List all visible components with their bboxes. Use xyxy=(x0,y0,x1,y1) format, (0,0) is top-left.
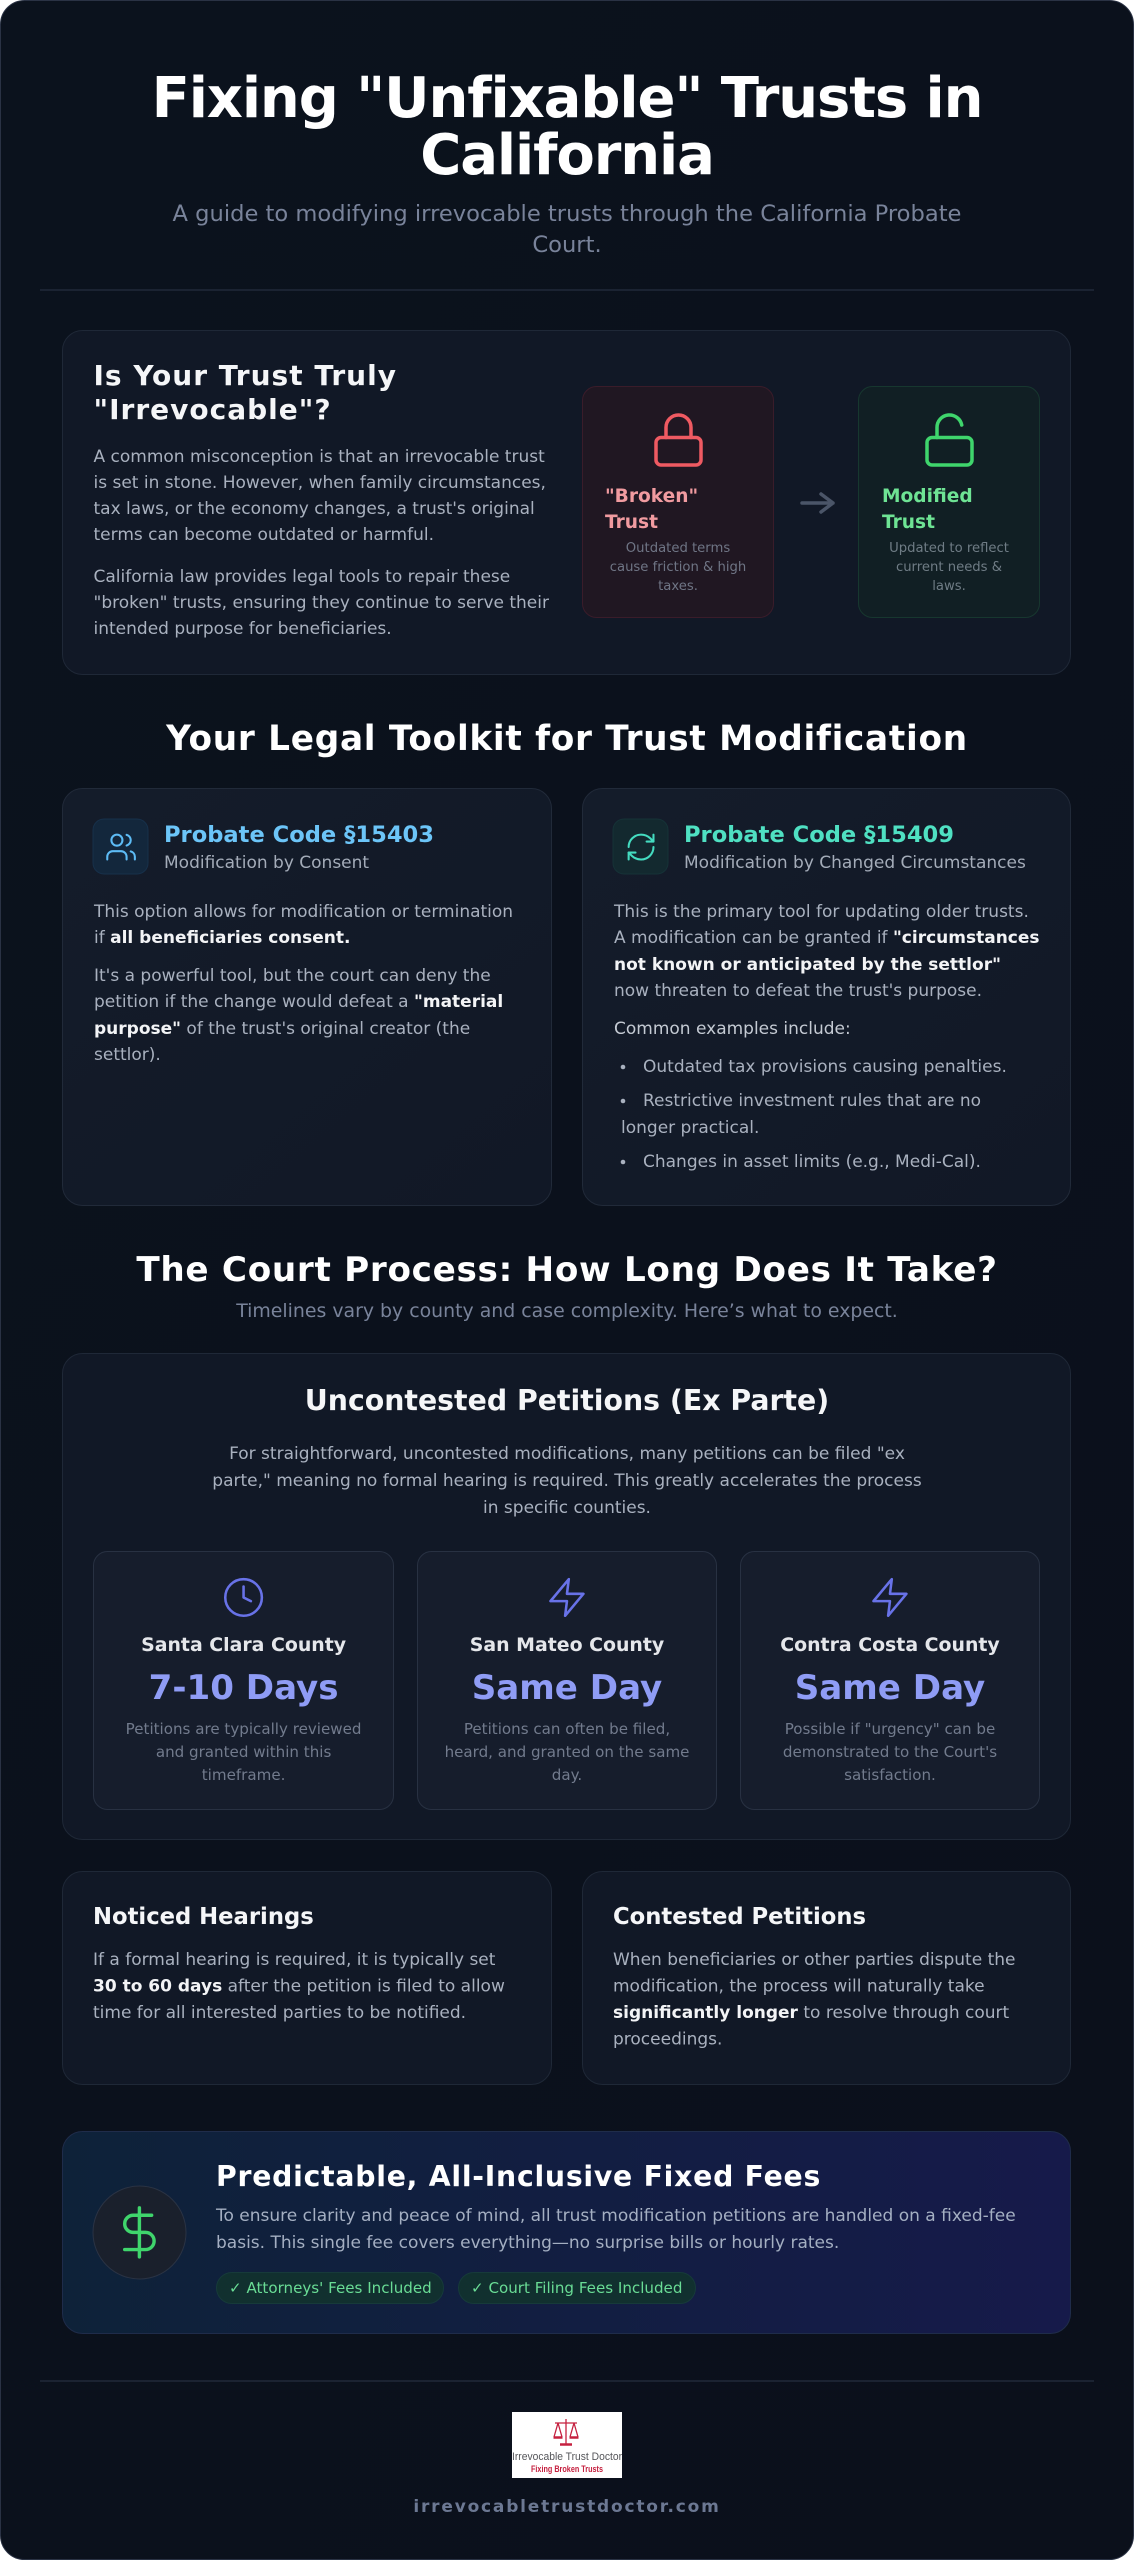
icon: scales xyxy=(554,2419,578,2444)
footer logo: Fixing Broken Trusts xyxy=(531,2464,603,2474)
title: Fixing "Unfixable" Trusts in xyxy=(152,66,982,131)
panel: is your trust truly irrevocable xyxy=(62,330,1070,674)
card: san mateo: Same Day xyxy=(472,1668,662,1708)
panel: noticed hearings: time for all interested parties to be notified. xyxy=(93,2003,466,2023)
icon: users xyxy=(93,819,148,874)
panel: contested petitions: proceedings. xyxy=(613,2030,722,2050)
bullet list: longer practical. xyxy=(621,1118,759,1138)
icon: open lock xyxy=(927,415,972,465)
section heading: court process xyxy=(136,1250,998,1322)
panel intro: parte," meaning no formal hearing is required. This greatly accelerates the process xyxy=(212,1471,922,1491)
panel: contested petitions: When beneficiaries or other parties dispute the xyxy=(613,1950,1016,1970)
intro text: California law provides legal tools to repair these xyxy=(94,567,510,587)
card: contra costa: demonstrated to the Court's xyxy=(783,1743,997,1761)
card: santa clara: and granted within this xyxy=(156,1743,331,1761)
card: modified trust: Updated to reflect xyxy=(889,541,1009,556)
icon: refresh xyxy=(613,819,668,874)
panel: noticed hearings: Noticed Hearings xyxy=(93,1904,314,1930)
footer logo xyxy=(512,2412,622,2478)
fee text: basis. This single fee covers everything—no surprise bills or hourly rates. xyxy=(216,2233,839,2253)
intro text: tax laws, or the economy changes, a trust's original xyxy=(94,499,535,519)
fee text: To ensure clarity and peace of mind, all trust modification petitions are handled on a fixed-fee xyxy=(215,2206,1016,2226)
panel: uncontested petitions xyxy=(62,1354,1070,1840)
intro text: is set in stone. However, when family circumstances, xyxy=(94,473,546,493)
panel intro: For straightforward, uncontested modifications, many petitions can be filed "ex xyxy=(229,1444,905,1464)
heading: Is Your Trust Truly xyxy=(94,359,397,392)
header xyxy=(152,66,982,258)
pill: attorneys fees: ✓ Attorneys' Fees Included xyxy=(229,2279,432,2297)
card: san mateo: heard, and granted on the same xyxy=(445,1743,689,1761)
icon: clock xyxy=(225,1579,262,1616)
panel: noticed hearings: 30 to 60 days after the petition is filed to allow xyxy=(93,1976,505,1996)
card: san mateo: day. xyxy=(552,1766,582,1784)
title: California xyxy=(420,123,714,188)
panel: probate code 15409 xyxy=(582,788,1070,1206)
panel: probate code 15403 xyxy=(62,788,552,1206)
panel: contested petitions xyxy=(582,1872,1070,2084)
panel: contested petitions: significantly longer to resolve through court xyxy=(613,2003,1009,2023)
card: contra costa: satisfaction. xyxy=(844,1766,936,1784)
footer website: irrevocabletrustdoctor.com xyxy=(413,2497,721,2517)
body text: petition if the change would defeat a "material xyxy=(94,992,503,1012)
panel: noticed hearings xyxy=(62,1872,552,2084)
body text: This is the primary tool for updating older trusts. xyxy=(613,902,1029,922)
card: broken trust: cause friction & high xyxy=(610,560,746,575)
body text: if all beneficiaries consent. xyxy=(94,928,350,948)
icon: dollar xyxy=(93,2186,186,2279)
card: broken trust xyxy=(582,386,774,618)
card: modified trust: laws. xyxy=(932,579,966,594)
card: san mateo: San Mateo County xyxy=(470,1634,664,1656)
card: modified trust: Trust xyxy=(882,512,935,533)
intro text: "broken" trusts, ensuring they continue to serve their xyxy=(94,593,549,613)
panel title: Uncontested Petitions (Ex Parte) xyxy=(305,1384,829,1417)
card: santa clara xyxy=(94,1552,394,1810)
body text: A modification can be granted if "circumstances xyxy=(614,928,1040,948)
intro text: terms can become outdated or harmful. xyxy=(94,525,434,545)
card: santa clara: timeframe. xyxy=(202,1766,285,1784)
card: santa clara: Santa Clara County xyxy=(141,1634,346,1656)
panel: fixed fees xyxy=(62,2132,1070,2334)
card: contra costa: Same Day xyxy=(795,1668,985,1708)
pill: attorneys fees xyxy=(216,2272,444,2304)
card: santa clara: 7-10 Days xyxy=(149,1668,339,1708)
card: broken trust: taxes. xyxy=(658,579,698,594)
card: modified trust xyxy=(858,386,1040,618)
code title: Probate Code §15403 xyxy=(164,822,434,848)
icon: lightning xyxy=(873,1579,906,1616)
intro text: intended purpose for beneficiaries. xyxy=(94,619,392,639)
card: san mateo: Petitions can often be filed, xyxy=(464,1720,670,1738)
fee heading: Predictable, All-Inclusive Fixed Fees xyxy=(216,2160,821,2193)
card: santa clara: Petitions are typically reviewed xyxy=(126,1720,362,1738)
card: broken trust: Trust xyxy=(605,512,658,533)
card: modified trust: Modified xyxy=(882,486,973,507)
card: broken trust: Outdated terms xyxy=(626,541,730,556)
icon: lightning xyxy=(550,1579,583,1616)
card: modified trust: current needs & xyxy=(896,560,1002,575)
panel intro: in specific counties. xyxy=(483,1498,651,1518)
bullet list: Outdated tax provisions causing penalties. xyxy=(643,1057,1007,1077)
card: broken trust: "Broken" xyxy=(605,486,698,507)
bullet list: Restrictive investment rules that are no xyxy=(643,1091,981,1111)
code subtitle: Modification by Consent xyxy=(164,853,369,873)
subtitle: Court. xyxy=(532,232,602,258)
intro text: A common misconception is that an irrevocable trust xyxy=(94,447,545,467)
section heading: court process: The Court Process: How Long Does It Take? xyxy=(136,1250,998,1290)
pill: court filing fees: ✓ Court Filing Fees Included xyxy=(471,2279,682,2297)
panel: noticed hearings: If a formal hearing is required, it is typically set xyxy=(93,1950,496,1970)
body text: purpose" of the trust's original creator (the xyxy=(94,1019,470,1039)
body text: not known or anticipated by the settlor" xyxy=(614,955,1001,975)
body text: settlor). xyxy=(94,1045,161,1065)
card: contra costa: Contra Costa County xyxy=(780,1634,1000,1656)
subtitle: A guide to modifying irrevocable trusts through the California Probate xyxy=(173,201,961,227)
panel: contested petitions: Contested Petitions xyxy=(613,1904,866,1930)
bullet list: Changes in asset limits (e.g., Medi-Cal). xyxy=(643,1152,981,1172)
code title: Probate Code §15409 xyxy=(684,822,954,848)
section subtitle: Timelines vary by county and case complexity. Here’s what to expect. xyxy=(235,1300,898,1322)
section heading: legal toolkit: Your Legal Toolkit for Trust Modification xyxy=(165,719,968,759)
card: contra costa xyxy=(740,1552,1040,1810)
bullet list xyxy=(621,1057,1007,1172)
card: contra costa: Possible if "urgency" can be xyxy=(785,1720,995,1738)
icon: closed lock xyxy=(656,415,701,465)
body text: It's a powerful tool, but the court can deny the xyxy=(94,966,491,986)
arrow xyxy=(802,494,833,512)
panel: contested petitions: modification, the process will naturally take xyxy=(613,1976,985,1996)
card: san mateo xyxy=(418,1552,716,1810)
pill: court filing fees xyxy=(458,2272,696,2304)
body text: Common examples include: xyxy=(614,1019,851,1039)
footer logo: Irrevocable Trust Doctor xyxy=(512,2451,622,2463)
body text: now threaten to defeat the trust's purpose. xyxy=(614,981,982,1001)
heading: "Irrevocable"? xyxy=(94,393,332,426)
body text: This option allows for modification or termination xyxy=(93,902,513,922)
code subtitle: Modification by Changed Circumstances xyxy=(684,853,1026,873)
